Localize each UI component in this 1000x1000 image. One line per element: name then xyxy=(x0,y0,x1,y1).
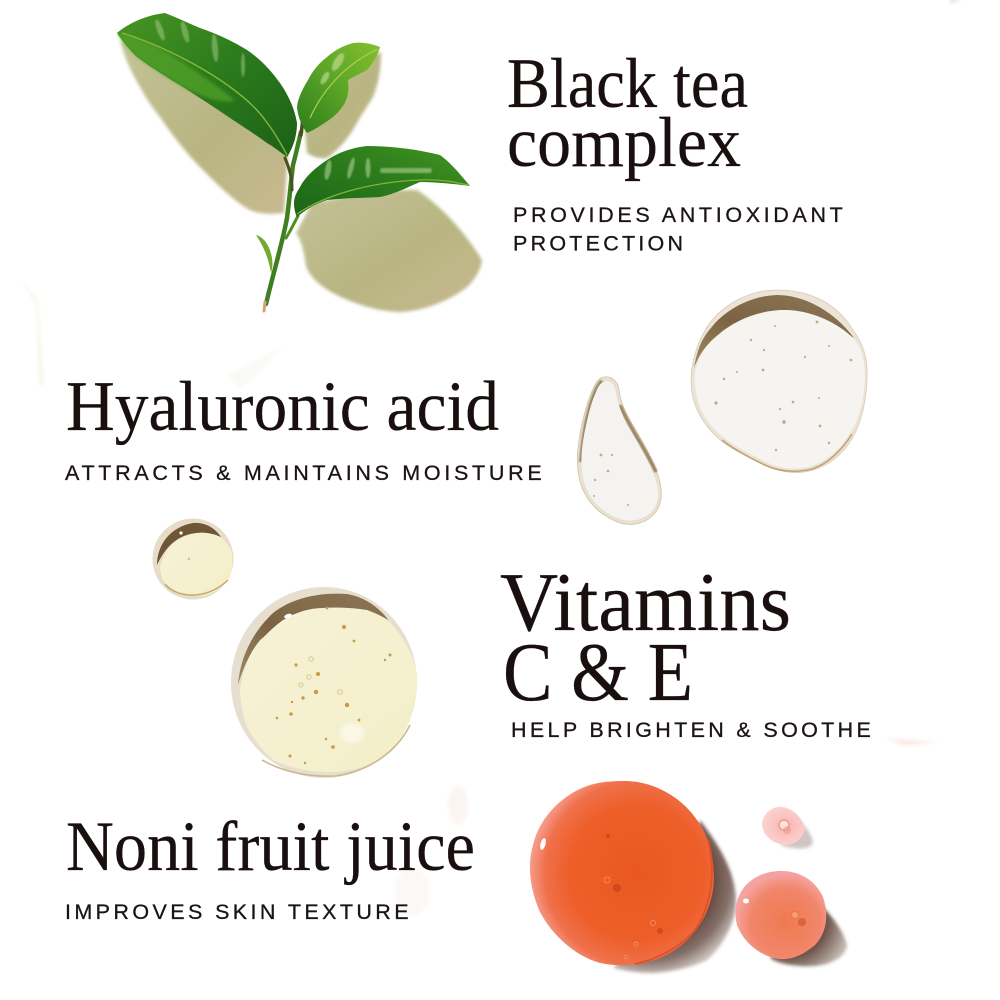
illustration: large oil droplet xyxy=(231,587,417,778)
illustration: teardrop droplet xyxy=(577,377,661,524)
description: antioxidant protection xyxy=(513,203,846,256)
heading: Black tea complex xyxy=(507,45,748,182)
heading: Vitamins C & E: C & E xyxy=(503,626,693,719)
sprout xyxy=(256,235,272,273)
leaf 3 xyxy=(294,146,470,217)
illustration: tea leaf sprig xyxy=(117,13,482,312)
heading: Noni fruit juice: Noni fruit juice xyxy=(66,808,475,886)
illustration: small oil droplet xyxy=(152,518,234,600)
panel: vitamins C and E xyxy=(152,518,874,778)
description: antioxidant protection: PROVIDES ANTIOXIDANT xyxy=(513,203,846,227)
heading: Black tea complex: complex xyxy=(507,104,741,182)
heading: Vitamins C & E: Vitamins xyxy=(500,556,791,649)
illustration: large orange droplet xyxy=(530,781,714,965)
leaf shadows xyxy=(120,40,482,312)
panel: noni fruit juice xyxy=(65,781,847,973)
description: brighten and soothe: HELP BRIGHTEN & SOOTHE xyxy=(511,718,874,742)
illustration: juice droplet shadows xyxy=(613,812,847,973)
illustration: medium orange droplet xyxy=(735,871,826,959)
leaf 1 xyxy=(117,13,297,157)
heading: Hyaluronic acid: Hyaluronic acid xyxy=(66,368,499,446)
panel: black tea xyxy=(117,13,846,312)
leaf 2 xyxy=(297,43,380,133)
heading: Vitamins C & E xyxy=(500,556,791,719)
heading: Black tea complex: Black tea xyxy=(507,45,748,123)
illustration: tiny pink droplet xyxy=(762,807,805,845)
stem xyxy=(264,90,305,311)
description: moisture: ATTRACTS & MAINTAINS MOISTURE xyxy=(65,461,545,485)
illustration: large clear droplet xyxy=(691,290,867,473)
description: antioxidant protection: PROTECTION xyxy=(513,232,686,256)
panel: hyaluronic acid xyxy=(65,290,867,524)
description: skin texture: IMPROVES SKIN TEXTURE xyxy=(65,900,412,924)
